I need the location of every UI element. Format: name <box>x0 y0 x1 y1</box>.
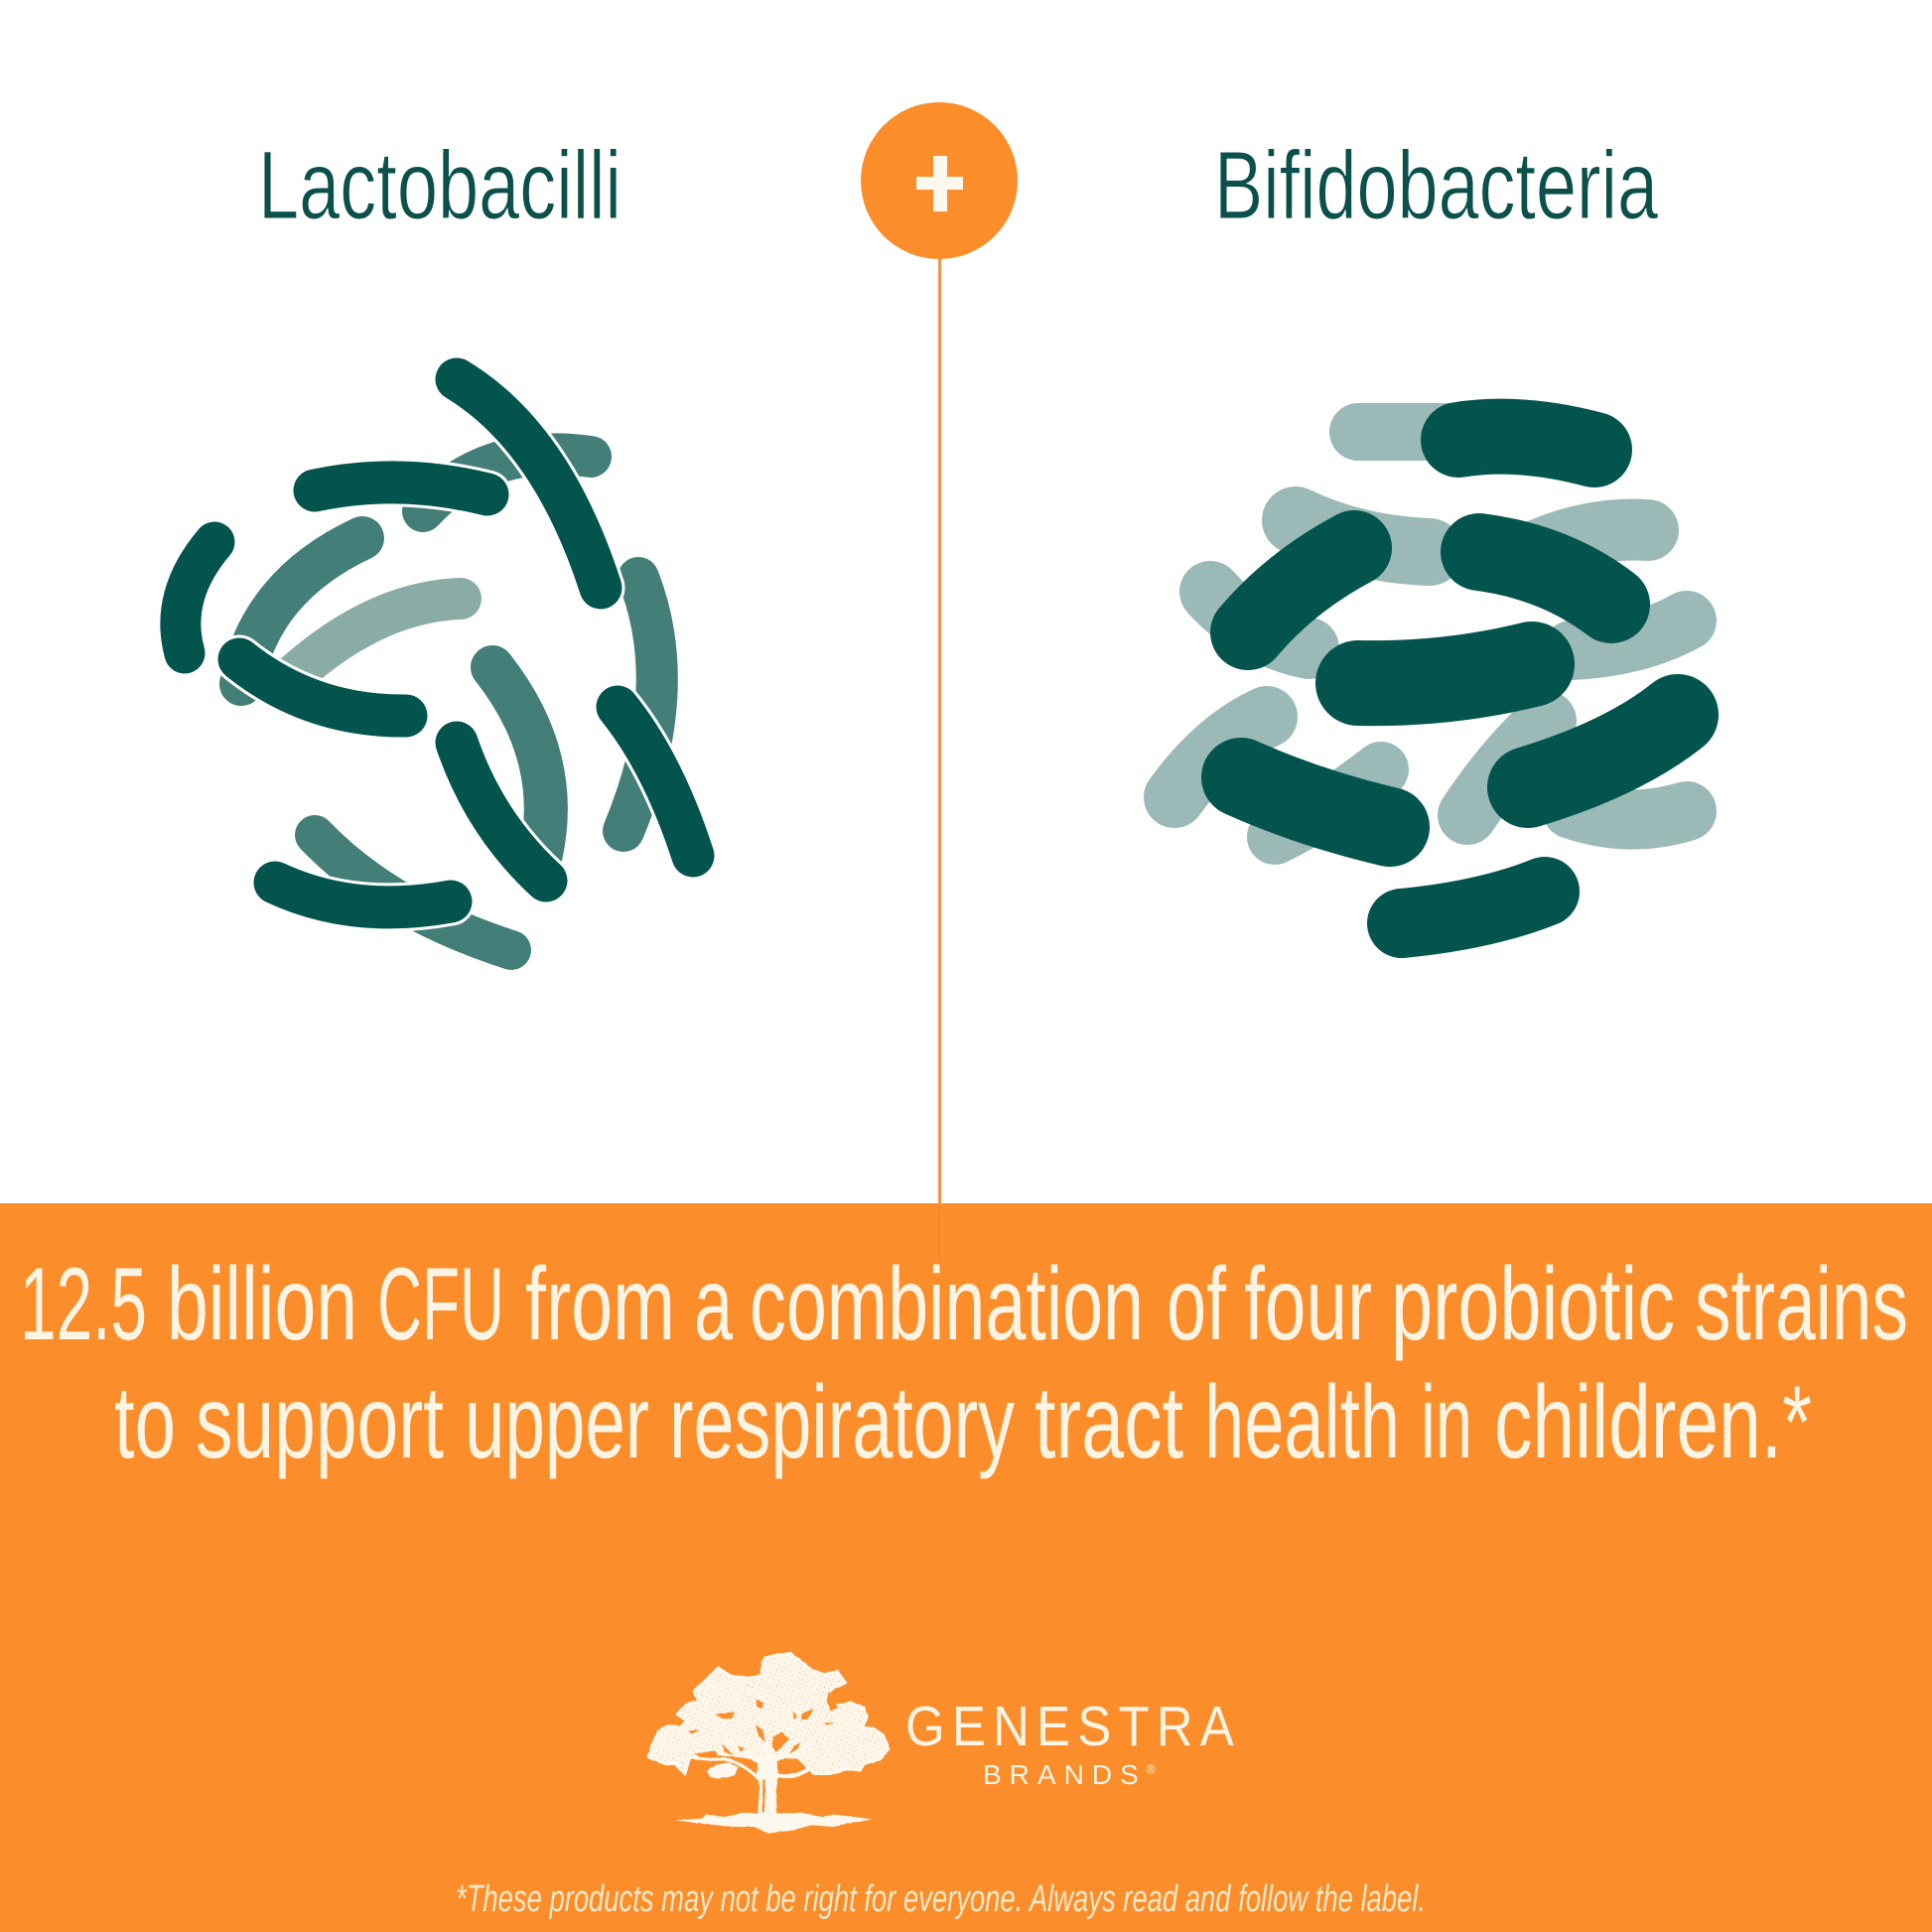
icon: tree logo <box>648 1654 889 1834</box>
faint line continuation <box>938 1204 940 1266</box>
connector line <box>938 253 941 1204</box>
main message line 2: in <box>1421 1365 1472 1480</box>
footnote: *These products may not be right for everyone. Always read and follow the label. <box>456 1878 1426 1920</box>
main message line 1: from <box>525 1247 675 1362</box>
heading: Lactobacilli: Lactobacilli <box>258 131 621 239</box>
main message line 2: upper <box>465 1365 649 1480</box>
panel: orange footer band <box>0 1203 1932 1932</box>
illustration: bifidobacteria cluster <box>1174 432 1687 923</box>
main message line 2: respiratory <box>669 1365 1015 1480</box>
main message line 1: of <box>1167 1247 1227 1362</box>
logo wordmark: BRANDS: ® <box>1147 1762 1156 1776</box>
main message line 2: to <box>114 1365 176 1480</box>
logo wordmark: GENESTRA: GENESTRA <box>905 1695 1241 1758</box>
logo wordmark: BRANDS: BRANDS <box>983 1759 1147 1790</box>
heading: Bifidobacteria: Bifidobacteria <box>1214 131 1658 239</box>
main message line 1: billion <box>167 1247 357 1362</box>
main message line 1: 12.5 <box>20 1247 147 1362</box>
main message line 2: tract <box>1035 1365 1183 1480</box>
main message line 1: four <box>1244 1247 1372 1362</box>
main message line 2: support <box>196 1365 444 1480</box>
icon: plus badge <box>861 102 1018 259</box>
illustration: lactobacilli cluster <box>181 379 693 950</box>
main message line 1: a <box>694 1247 733 1362</box>
main message line 1: combination <box>750 1247 1144 1362</box>
main message line 2: children.* <box>1494 1365 1812 1480</box>
main message line 1: CFU <box>377 1247 504 1362</box>
main message line 2: health <box>1204 1365 1400 1480</box>
main message line 1: probiotic <box>1391 1247 1675 1362</box>
